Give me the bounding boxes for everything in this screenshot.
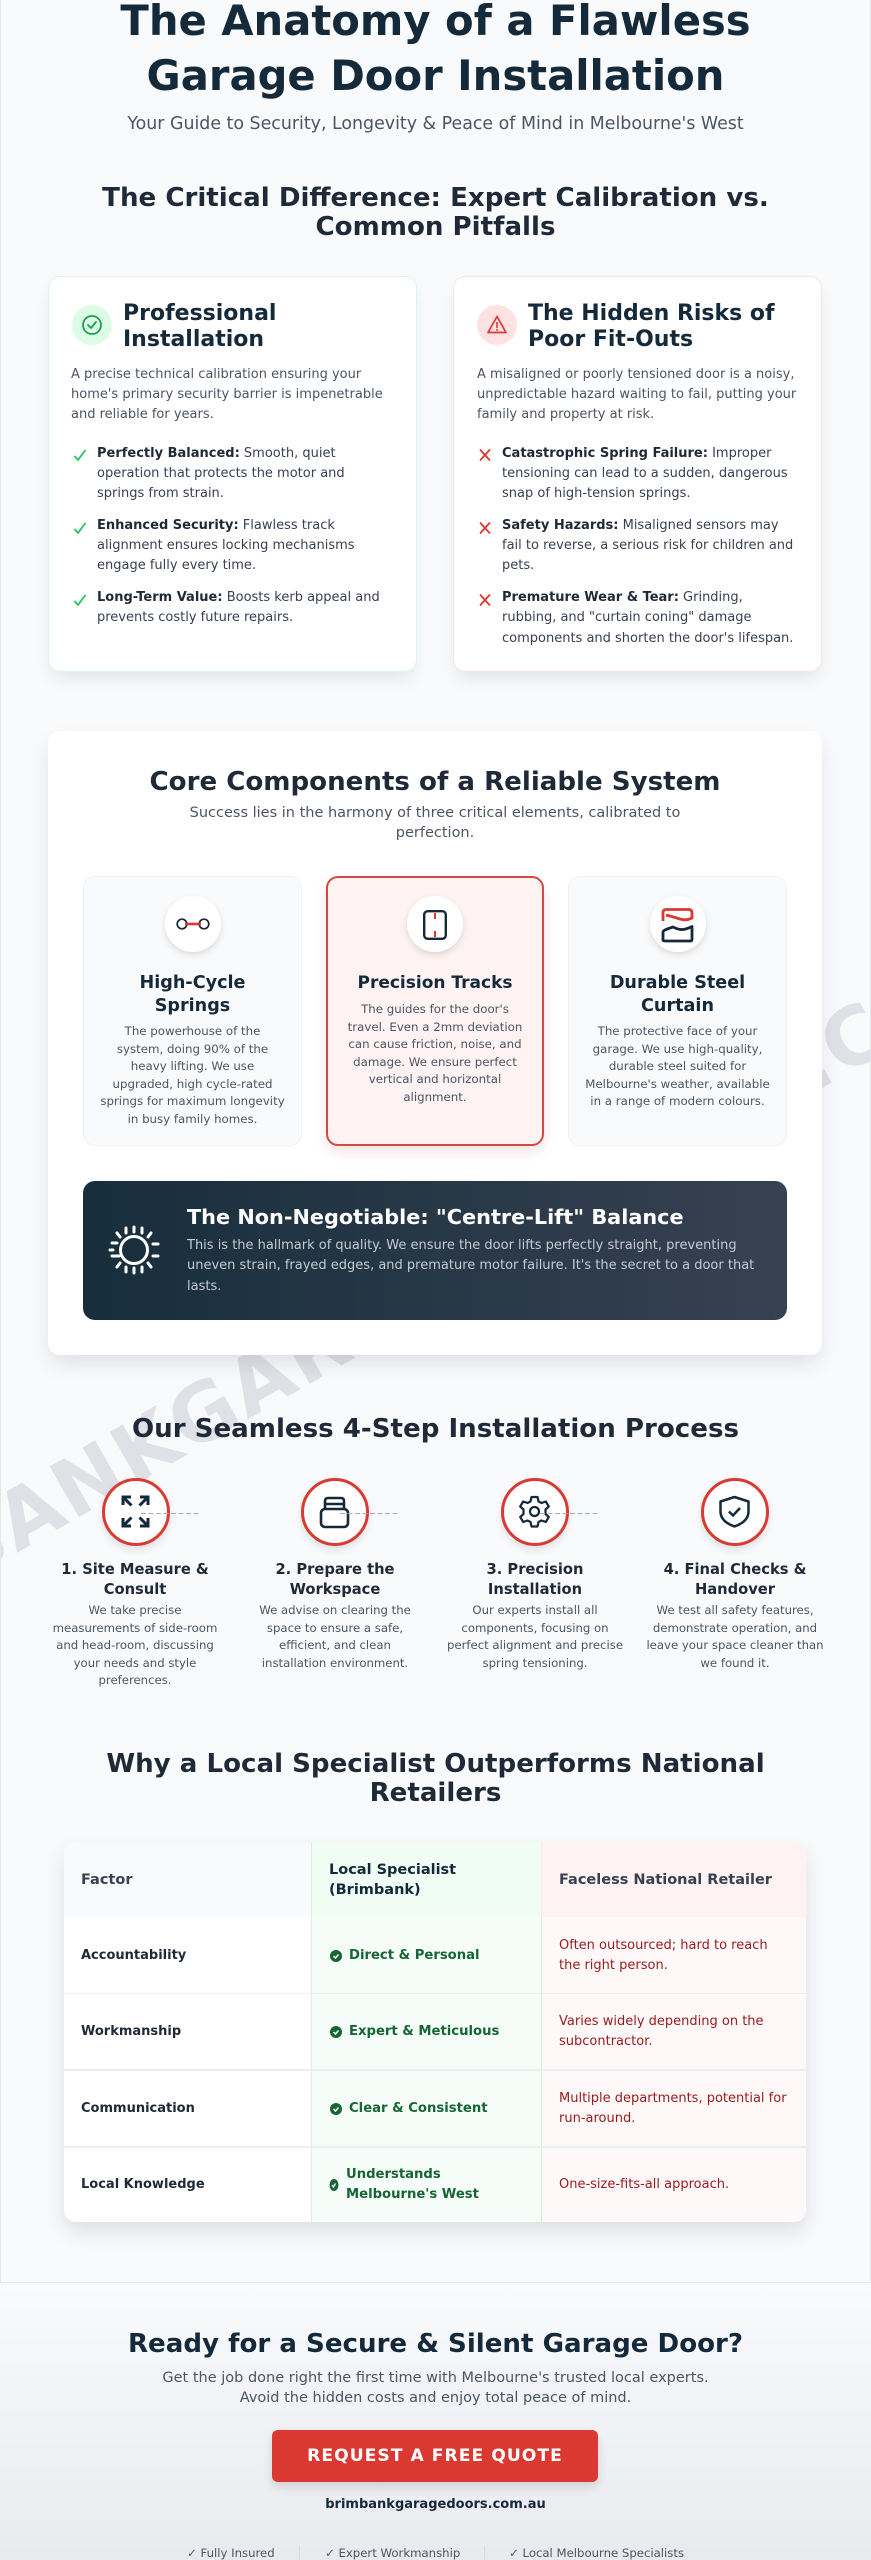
connector — [340, 1512, 400, 1514]
intro text: A misaligned or poorly tensioned door is a noisy, — [477, 366, 794, 382]
column backgrounds — [64, 1842, 806, 2222]
step 2 — [259, 1478, 411, 1670]
benefit: value — [97, 590, 380, 625]
footer text — [0, 2368, 871, 2408]
description: The guides for the door's — [361, 1002, 509, 1016]
trust badges — [0, 2543, 871, 2560]
step title: Installation — [488, 1581, 582, 1598]
step title: Consult — [104, 1581, 166, 1598]
risk: safety — [502, 518, 793, 573]
title: Durable Steel — [610, 973, 745, 993]
description: upgraded, high cycle-rated — [113, 1076, 272, 1090]
subheading — [190, 804, 680, 841]
description: garage. We use high-quality, — [593, 1042, 762, 1056]
icon: jar — [301, 1478, 369, 1546]
icon: sun — [108, 1226, 160, 1274]
heading: critical difference: The Critical Difference: Expert Calibration vs. — [102, 182, 769, 212]
row: accountability: the right person. — [559, 1958, 668, 1973]
description: vertical and horizontal — [369, 1072, 501, 1086]
description: system, doing 90% of the — [117, 1042, 268, 1056]
row: workmanship: Expert & Meticulous — [349, 2024, 499, 2039]
step title — [487, 1561, 583, 1598]
callout text: uneven strain, frayed edges, and premature motor failure. It's the secret to a door that — [187, 1258, 754, 1273]
icon: tick 1 — [74, 450, 86, 462]
card: springs — [83, 876, 302, 1146]
benefit: value: Long-Term Value: Boosts kerb appeal and — [97, 590, 380, 605]
benefit: security: Enhanced Security: Flawless track — [97, 518, 335, 532]
trust badges: ✓ Local Melbourne Specialists — [509, 2546, 684, 2560]
icon: warning triangle — [477, 305, 517, 345]
description: in a range of modern colours. — [590, 1094, 765, 1108]
risk: safety: fail to reverse, a serious risk for children and — [502, 538, 793, 553]
icon: gear — [501, 1478, 569, 1546]
step text: your needs and style — [74, 1656, 196, 1670]
card: tracks — [326, 876, 544, 1146]
description — [100, 1024, 285, 1126]
step text: Our experts install all — [472, 1603, 598, 1617]
step text: demonstrate operation, and — [653, 1620, 817, 1634]
trust badges: ✓ Expert Workmanship — [325, 2546, 460, 2560]
description: Melbourne's weather, available — [585, 1076, 770, 1090]
heading: Poor Fit-Outs — [528, 327, 693, 352]
description: heavy lifting. We use — [131, 1059, 254, 1073]
header row: Faceless National Retailer — [559, 1872, 772, 1888]
header row: (Brimbank) — [329, 1882, 421, 1898]
footer text: Get the job done right the first time with Melbourne's trusted local experts. — [162, 2370, 709, 2386]
step text: We advise on clearing the — [259, 1603, 411, 1617]
website: brimbankgaragedoors.com.au — [325, 2497, 546, 2512]
row: accountability: Often outsourced; hard to reach — [559, 1938, 768, 1953]
row: workmanship: subcontractor. — [559, 2034, 652, 2049]
risk: safety: Safety Hazards: Misaligned sensors may — [502, 518, 779, 532]
step text — [259, 1603, 411, 1670]
step title: 3. Precision — [487, 1561, 583, 1578]
step text: leave your space cleaner than — [646, 1638, 824, 1652]
step title: 1. Site Measure & — [61, 1561, 209, 1578]
step title — [61, 1561, 209, 1598]
step 3 — [447, 1478, 623, 1670]
benefit: security — [97, 518, 355, 573]
row: local knowledge: Understands — [346, 2167, 441, 2182]
panel: hidden risks — [453, 276, 822, 672]
step text — [635, 1602, 835, 1672]
row: local knowledge — [64, 2147, 806, 2222]
step title: 4. Final Checks & — [664, 1561, 806, 1578]
callout: centre-lift balance — [83, 1181, 787, 1320]
intro text — [71, 366, 383, 422]
row: accountability: Accountability — [81, 1948, 186, 1963]
heading — [528, 300, 775, 352]
callout text — [186, 1238, 754, 1294]
heading: comparison: Retailers — [370, 1778, 501, 1808]
heading: comparison: Why a Local Specialist Outperforms National — [106, 1748, 765, 1778]
risk: safety: pets. — [502, 558, 534, 573]
description: The powerhouse of the — [125, 1024, 260, 1038]
title — [120, 0, 751, 100]
callout heading: The Non-Negotiable: "Centre-Lift" Balance — [187, 1205, 684, 1229]
benefit: balanced: operation that protects the motor and — [97, 466, 345, 481]
title — [610, 973, 745, 1016]
step text: We take precise — [89, 1603, 181, 1617]
title: Garage Door Installation — [147, 50, 724, 100]
row: communication: Communication — [81, 2101, 195, 2116]
row: workmanship: Workmanship — [81, 2024, 181, 2039]
description: damage. We ensure perfect — [353, 1054, 517, 1068]
step text: we found it. — [700, 1656, 770, 1670]
icon: tick 3 — [74, 594, 86, 606]
step 1 — [53, 1478, 217, 1687]
description: durable steel suited for — [609, 1059, 746, 1073]
icon: check circle — [72, 305, 112, 345]
header row: Factor — [81, 1872, 132, 1888]
trust badges: ✓ Fully Insured — [187, 2546, 275, 2560]
footer heading: Ready for a Secure & Silent Garage Door? — [128, 2329, 743, 2359]
description: The protective face of your — [598, 1024, 757, 1038]
benefit: security: engage fully every time. — [97, 558, 256, 573]
intro text: home's primary security barrier is impenetrable — [71, 387, 383, 402]
icon: expand arrows — [102, 1478, 170, 1546]
risk: wear — [502, 590, 793, 646]
description — [348, 1002, 522, 1104]
heading: process: Our Seamless 4-Step Installation Process — [132, 1414, 739, 1444]
intro text: family and property at risk. — [477, 407, 654, 422]
panel: core components — [48, 731, 822, 1355]
title: Precision Tracks — [357, 973, 512, 993]
row: communication — [64, 2071, 806, 2147]
icon: curtain — [650, 896, 706, 952]
step title: Workspace — [290, 1581, 380, 1598]
row: communication: run-around. — [559, 2111, 635, 2126]
heading — [123, 300, 276, 352]
heading: comparison — [0, 1750, 871, 1808]
step text — [447, 1603, 623, 1670]
step text: preferences. — [98, 1673, 172, 1687]
step title — [275, 1561, 395, 1598]
icon: cross 1 — [479, 448, 491, 462]
callout text: lasts. — [187, 1279, 221, 1294]
heading: critical difference: Common Pitfalls — [316, 212, 555, 242]
footer text: Avoid the hidden costs and enjoy total peace of mind. — [240, 2390, 631, 2406]
benefit: balanced — [97, 446, 345, 501]
risk: wear: Premature Wear & Tear: Grinding, — [502, 590, 743, 605]
benefit: value: prevents costly future repairs. — [97, 610, 293, 625]
row: local knowledge: Local Knowledge — [81, 2177, 205, 2192]
step 4 — [646, 1478, 824, 1670]
step title — [664, 1561, 806, 1598]
row: accountability — [64, 1918, 806, 1994]
card: curtain — [568, 876, 787, 1146]
row: accountability: Direct & Personal — [349, 1948, 480, 1963]
intro text: A precise technical calibration ensuring your — [71, 366, 361, 382]
header row — [64, 1842, 806, 1917]
benefit: balanced: springs from strain. — [97, 486, 224, 501]
button: REQUEST A FREE QUOTE — [307, 2446, 563, 2466]
title: High-Cycle — [140, 973, 245, 993]
row: communication: Clear & Consistent — [349, 2101, 488, 2116]
heading: The Hidden Risks of — [528, 300, 775, 326]
step text: perfect alignment and precise — [447, 1638, 623, 1652]
benefit: balanced: Perfectly Balanced: Smooth, quiet — [97, 446, 336, 460]
step text: We test all safety features, — [656, 1603, 814, 1617]
row: workmanship: Varies widely depending on the — [559, 2014, 764, 2029]
comparison table — [64, 1842, 806, 2222]
risk: spring failure — [502, 446, 788, 501]
description — [585, 1024, 770, 1108]
step text: and head-room, discussing — [56, 1638, 214, 1652]
risk: spring failure: Catastrophic Spring Failure: Improper — [502, 446, 771, 460]
button — [272, 2430, 598, 2482]
intro text: and reliable for years. — [71, 407, 214, 422]
step title: 2. Prepare the — [275, 1561, 395, 1578]
connector — [540, 1512, 600, 1514]
header row: Local Specialist — [329, 1862, 456, 1878]
description: travel. Even a 2mm deviation — [348, 1020, 522, 1034]
panel: professional installation — [48, 276, 417, 672]
risk: wear: rubbing, and "curtain coning" damage — [502, 610, 751, 625]
row: local knowledge: Melbourne's West — [346, 2187, 479, 2202]
subtitle: Your Guide to Security, Longevity & Peace of Mind in Melbourne's West — [127, 114, 744, 134]
heading: critical difference — [102, 182, 769, 242]
step text — [53, 1603, 217, 1687]
icon: track — [407, 896, 463, 952]
step text: spring tensioning. — [483, 1656, 587, 1670]
title: Curtain — [641, 996, 714, 1016]
step title: Handover — [695, 1581, 775, 1598]
subheading: perfection. — [396, 825, 474, 841]
intro text — [477, 366, 796, 422]
row: communication: Multiple departments, potential for — [559, 2091, 787, 2106]
footer call to action — [0, 2282, 871, 2560]
icon: cross 2 — [479, 522, 491, 534]
step text: efficient, and clean — [279, 1638, 391, 1652]
row: local knowledge: One-size-fits-all approach. — [559, 2177, 729, 2192]
callout text: This is the hallmark of quality. We ensure the door lifts perfectly straight, preventing — [187, 1238, 737, 1253]
risk: spring failure: tensioning can lead to a sudden, dangerous — [502, 466, 788, 481]
description: alignment. — [403, 1090, 467, 1104]
risk: spring failure: snap of high-tension springs. — [502, 486, 690, 501]
connector — [141, 1512, 200, 1514]
heading: Installation — [123, 327, 264, 352]
icon: spring — [165, 896, 221, 952]
title: Springs — [155, 996, 230, 1016]
risk: wear: components and shorten the door's lifespan. — [502, 631, 793, 646]
icon: shield check — [701, 1478, 769, 1546]
icon: tick 2 — [74, 522, 86, 534]
title — [140, 973, 245, 1016]
step text: components, focusing on — [461, 1620, 609, 1634]
step text: measurements of side-room — [53, 1620, 217, 1634]
subheading: Success lies in the harmony of three critical elements, calibrated to — [190, 804, 680, 820]
description: can cause friction, noise, and — [348, 1037, 522, 1051]
step text: space to ensure a safe, — [267, 1620, 403, 1634]
description: in busy family homes. — [128, 1112, 257, 1126]
benefit: security: alignment ensures locking mechanisms — [97, 538, 355, 553]
heading: Core Components of a Reliable System — [150, 766, 720, 796]
step text: installation environment. — [262, 1656, 408, 1670]
description: springs for maximum longevity — [100, 1094, 285, 1108]
heading: Professional — [123, 300, 276, 326]
intro text: unpredictable hazard waiting to fail, putting your — [477, 387, 796, 402]
icon: cross 3 — [479, 594, 491, 606]
row: workmanship — [64, 1994, 806, 2070]
